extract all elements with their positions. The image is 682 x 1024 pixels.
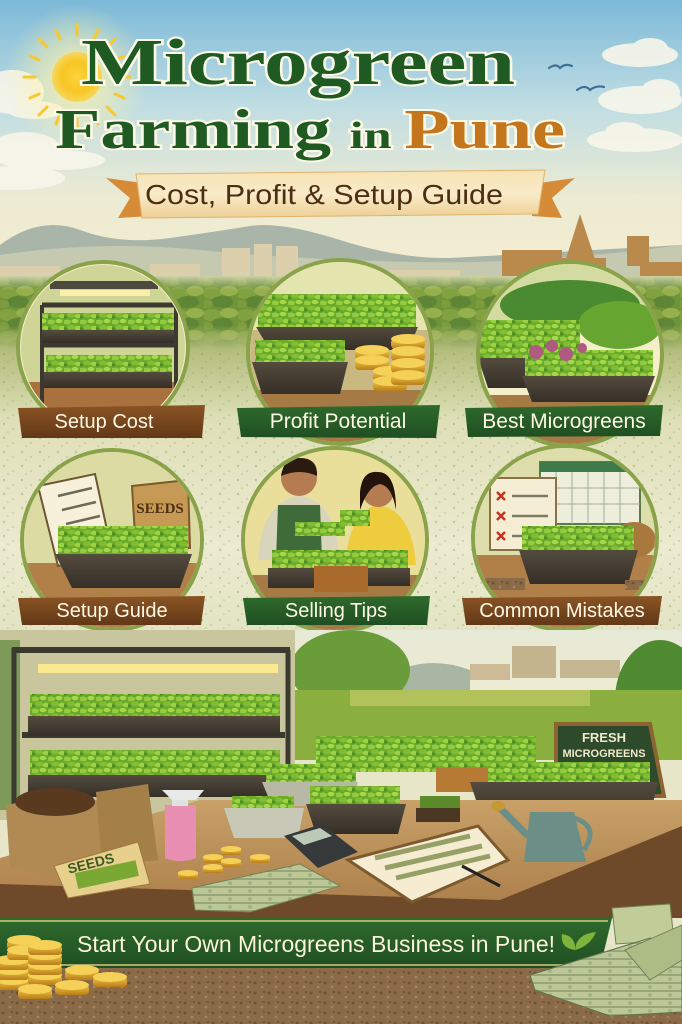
- panel: common mistakes: [473, 446, 658, 630]
- icon: watering can: [491, 801, 590, 862]
- clouds: [0, 38, 682, 190]
- label: profit potential: Profit Potential: [270, 410, 406, 433]
- label: best microgreens: [465, 405, 663, 437]
- panel: setup cost: [16, 260, 190, 408]
- sky background: [0, 0, 682, 262]
- wooden table: [0, 800, 682, 918]
- panel: best microgreens: [475, 262, 665, 450]
- label: setup cost: Setup Cost: [55, 411, 154, 433]
- soil sack: [6, 784, 158, 875]
- seeds packet: SEEDS: [66, 850, 116, 877]
- bottom banner: [0, 918, 612, 968]
- cash pile: [192, 864, 340, 912]
- clipboard chart: [348, 826, 508, 902]
- bottom ground: [0, 968, 682, 1024]
- middle background: [0, 350, 682, 635]
- label: common mistakes: Common Mistakes: [479, 600, 645, 622]
- bottom banner: Start Your Own Microgreens Business in Pune!: [77, 931, 555, 957]
- label: setup guide: [18, 596, 205, 625]
- title: Microgreen: [81, 26, 515, 99]
- icon: sun: [5, 5, 149, 149]
- subtitle ribbon: [106, 170, 575, 218]
- label: selling tips: [243, 596, 430, 625]
- outdoor trays and chalkboard sign: [316, 724, 664, 824]
- label: setup guide: Setup Guide: [56, 600, 168, 622]
- landscape: [0, 630, 682, 820]
- coin pile: [0, 935, 127, 999]
- subtitle ribbon: Cost, Profit & Setup Guide: [145, 179, 503, 210]
- money stacks: [530, 904, 682, 1016]
- label: setup cost: [18, 405, 205, 438]
- outdoor trays and chalkboard sign: MICROGREENS: [562, 748, 646, 760]
- title: [55, 26, 565, 161]
- label: best microgreens: Best Microgreens: [482, 410, 646, 433]
- icon: calculator: [284, 824, 358, 868]
- panel: farm scene: [0, 630, 682, 918]
- icon: sprout: [562, 932, 596, 950]
- outdoor trays and chalkboard sign: FRESH: [582, 730, 626, 745]
- forest band: [0, 276, 682, 350]
- hills and city skyline: [0, 214, 682, 285]
- seeds packet: [54, 842, 150, 898]
- icon: spray bottle: [162, 790, 204, 861]
- label: selling tips: Selling Tips: [285, 600, 387, 622]
- icon: birds: [549, 65, 604, 90]
- panel: setup guide: SEEDS: [136, 501, 184, 517]
- panel: profit potential: [245, 258, 435, 445]
- coin stacks: [178, 846, 270, 879]
- grow rack: [12, 648, 290, 810]
- label: profit potential: [237, 405, 440, 438]
- panel: setup guide: [20, 448, 205, 633]
- label: common mistakes: [462, 596, 662, 625]
- title: Farming in Pune: [55, 99, 565, 161]
- panel: selling tips: [243, 448, 428, 635]
- small trays: [224, 764, 460, 838]
